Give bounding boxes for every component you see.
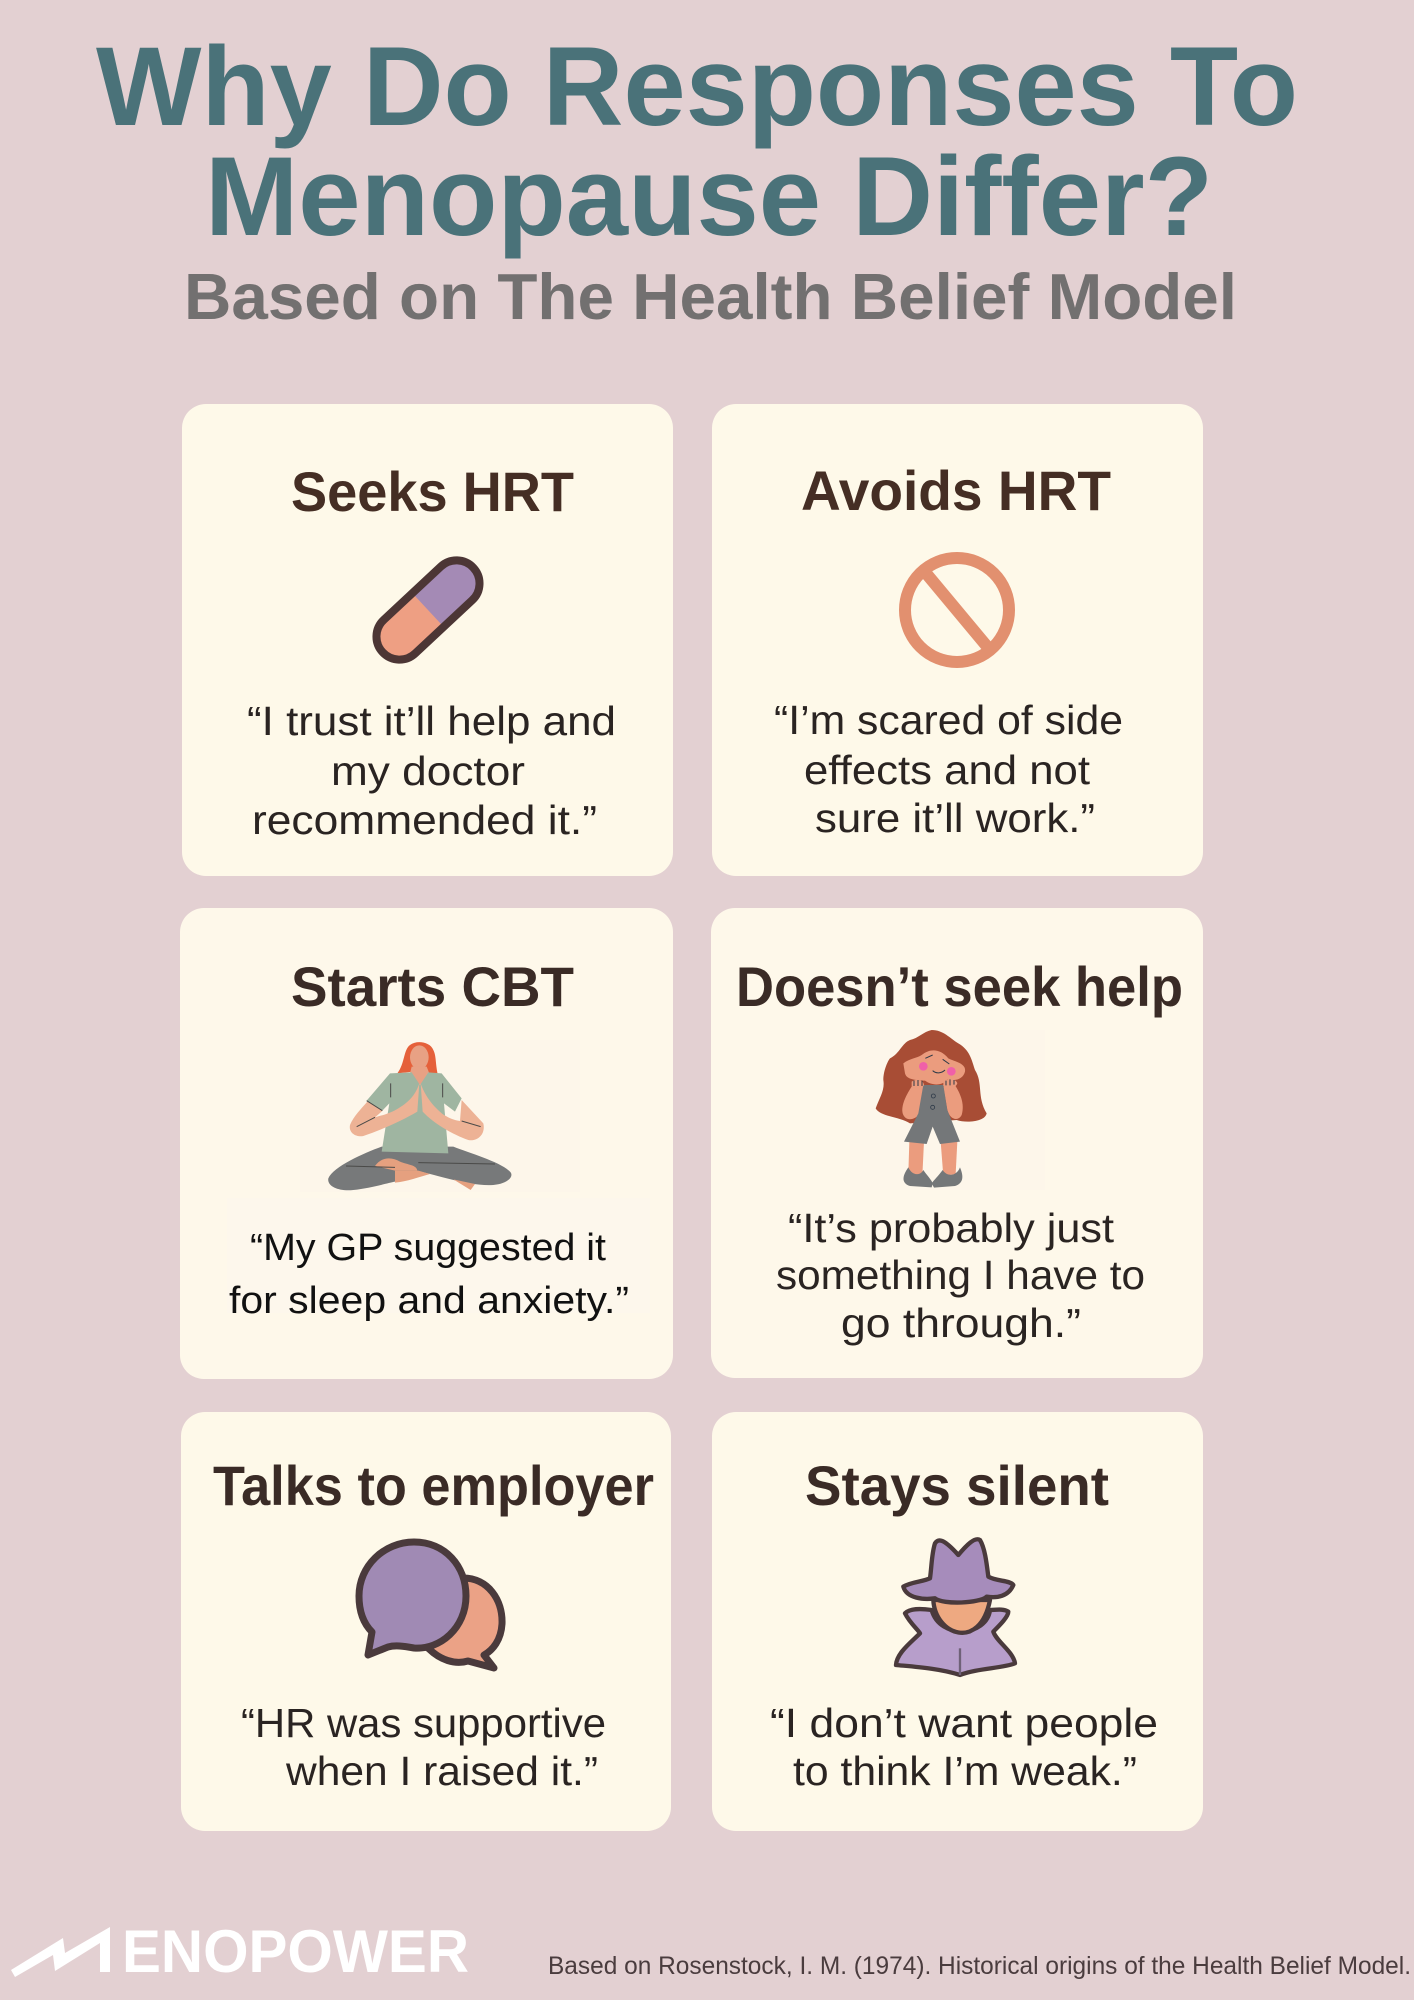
- quote: seeks HRT: “I trust it’ll help and: [247, 698, 616, 744]
- heading: talks to employer: Talks to employer: [213, 1454, 654, 1517]
- quote: doesn't seek help: [776, 1205, 1145, 1346]
- icon: hidden figure in hat: [896, 1539, 1015, 1675]
- subtitle: Based on The Health Belief Model: [184, 260, 1237, 333]
- quote: doesn't seek help: “It’s probably just: [788, 1205, 1115, 1251]
- quote: avoids HRT: “I’m scared of side: [774, 697, 1123, 743]
- title: Menopause Differ?: [205, 134, 1213, 259]
- quote: talks to employer: [241, 1700, 606, 1794]
- quote: starts CBT: [229, 1227, 629, 1322]
- panel: talks to employer: [181, 1412, 671, 1831]
- icon: speech bubbles: [359, 1542, 502, 1668]
- logo: MENOPOWER: ENOPOWER: [122, 1918, 469, 1985]
- heading: doesn't seek help: Doesn’t seek help: [736, 955, 1183, 1018]
- quote: seeks HRT: recommended it.”: [252, 797, 597, 843]
- quote: starts CBT: “My GP suggested it: [250, 1227, 606, 1269]
- panel: stays silent: [712, 1412, 1203, 1831]
- panel: seeks HRT: [182, 404, 673, 876]
- quote: doesn't seek help: go through.”: [841, 1300, 1081, 1346]
- icon: meditating woman: [328, 1042, 511, 1190]
- quote: seeks HRT: [247, 698, 616, 843]
- icon: prohibition sign: [905, 558, 1009, 662]
- citation: Based on Rosenstock, I. M. (1974). Historical origins of the Health Belief Model.: [548, 1952, 1411, 1980]
- quote: stays silent: [770, 1700, 1158, 1794]
- quote: avoids HRT: [774, 697, 1123, 841]
- icon: worried girl: [876, 1030, 987, 1188]
- quote: seeks HRT: my doctor: [331, 748, 525, 794]
- quote: starts CBT: for sleep and anxiety.”: [229, 1280, 629, 1322]
- quote: avoids HRT: sure it’ll work.”: [815, 795, 1095, 841]
- panel: starts CBT: [180, 908, 673, 1379]
- quote: doesn't seek help: something I have to: [776, 1252, 1145, 1298]
- quote: stays silent: to think I’m weak.”: [793, 1748, 1137, 1794]
- heading: avoids HRT: Avoids HRT: [801, 459, 1111, 522]
- quote: stays silent: “I don’t want people: [770, 1700, 1158, 1746]
- title: Why Do Responses To: [96, 24, 1298, 149]
- heading: stays silent: Stays silent: [805, 1454, 1109, 1517]
- quote: talks to employer: “HR was supportive: [241, 1700, 606, 1746]
- panel: avoids HRT: [712, 404, 1203, 876]
- icon: capsule pill: [367, 551, 489, 669]
- quote: avoids HRT: effects and not: [804, 747, 1091, 793]
- title: [96, 24, 1298, 259]
- quote: talks to employer: when I raised it.”: [285, 1748, 598, 1794]
- heading: seeks HRT: Seeks HRT: [291, 460, 574, 523]
- panel: doesn't seek help: [711, 908, 1203, 1378]
- heading: starts CBT: Starts CBT: [291, 955, 574, 1018]
